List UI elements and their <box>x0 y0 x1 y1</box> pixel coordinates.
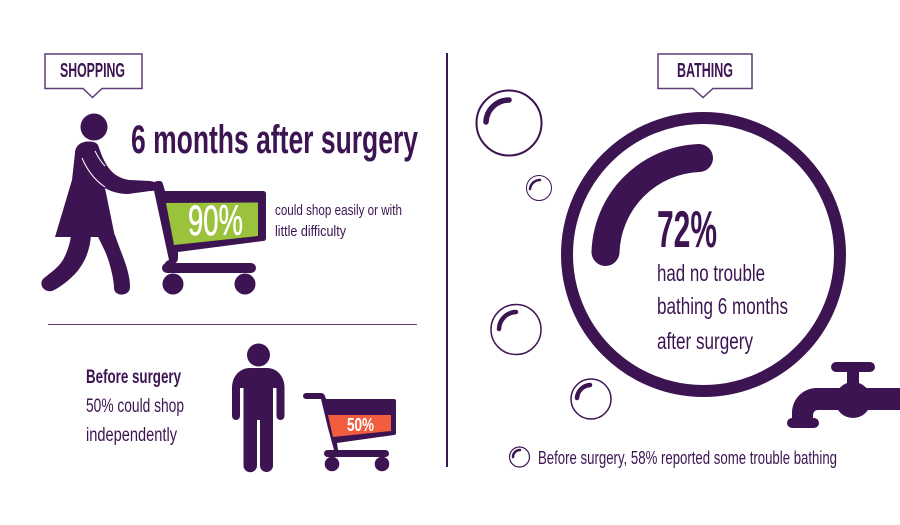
text: could shop easily <box>275 202 402 240</box>
icon: shopping cart 90% <box>153 181 266 294</box>
text: could shop easily: could shop easily or with <box>275 202 402 219</box>
icon: faucet <box>787 362 900 428</box>
icon: shopping cart 50%: 50% <box>347 415 374 435</box>
text: had no trouble bathing <box>657 260 788 354</box>
icon: large bubble <box>567 118 840 391</box>
text: had no trouble bathing: had no trouble <box>657 260 765 286</box>
callout: bathing label <box>658 54 752 98</box>
icon: shopping cart 90%: 90% <box>188 197 243 245</box>
text: could shop easily: little difficulty <box>275 223 346 240</box>
text: had no trouble bathing: bathing 6 months <box>657 293 788 319</box>
icon: bubble 1 <box>476 90 542 156</box>
panel: shopping <box>41 54 418 472</box>
stat: 72%: 72% <box>657 201 717 259</box>
panel: bathing <box>476 54 900 468</box>
text: before surgery shopping: Before surgery <box>86 367 181 388</box>
icon: shopping cart 50% <box>303 393 396 471</box>
text: before surgery shopping: 50% could shop <box>86 396 184 417</box>
callout: bathing label: BATHING <box>677 60 733 82</box>
text: before surgery shopping <box>86 367 184 446</box>
callout: shopping label <box>45 54 142 98</box>
icon: bubble 2 <box>526 176 552 200</box>
icon: standing man <box>232 344 284 472</box>
heading: 6 months after surgery: 6 months after surgery <box>131 118 418 162</box>
text: before surgery shopping: independently <box>86 425 177 446</box>
icon: bubble 3 <box>491 304 541 354</box>
callout: shopping label: SHOPPING <box>60 60 125 82</box>
icon: bubble 4 <box>571 379 611 419</box>
text: had no trouble bathing: after surgery <box>657 328 753 354</box>
icon: woman pushing cart <box>41 114 158 295</box>
